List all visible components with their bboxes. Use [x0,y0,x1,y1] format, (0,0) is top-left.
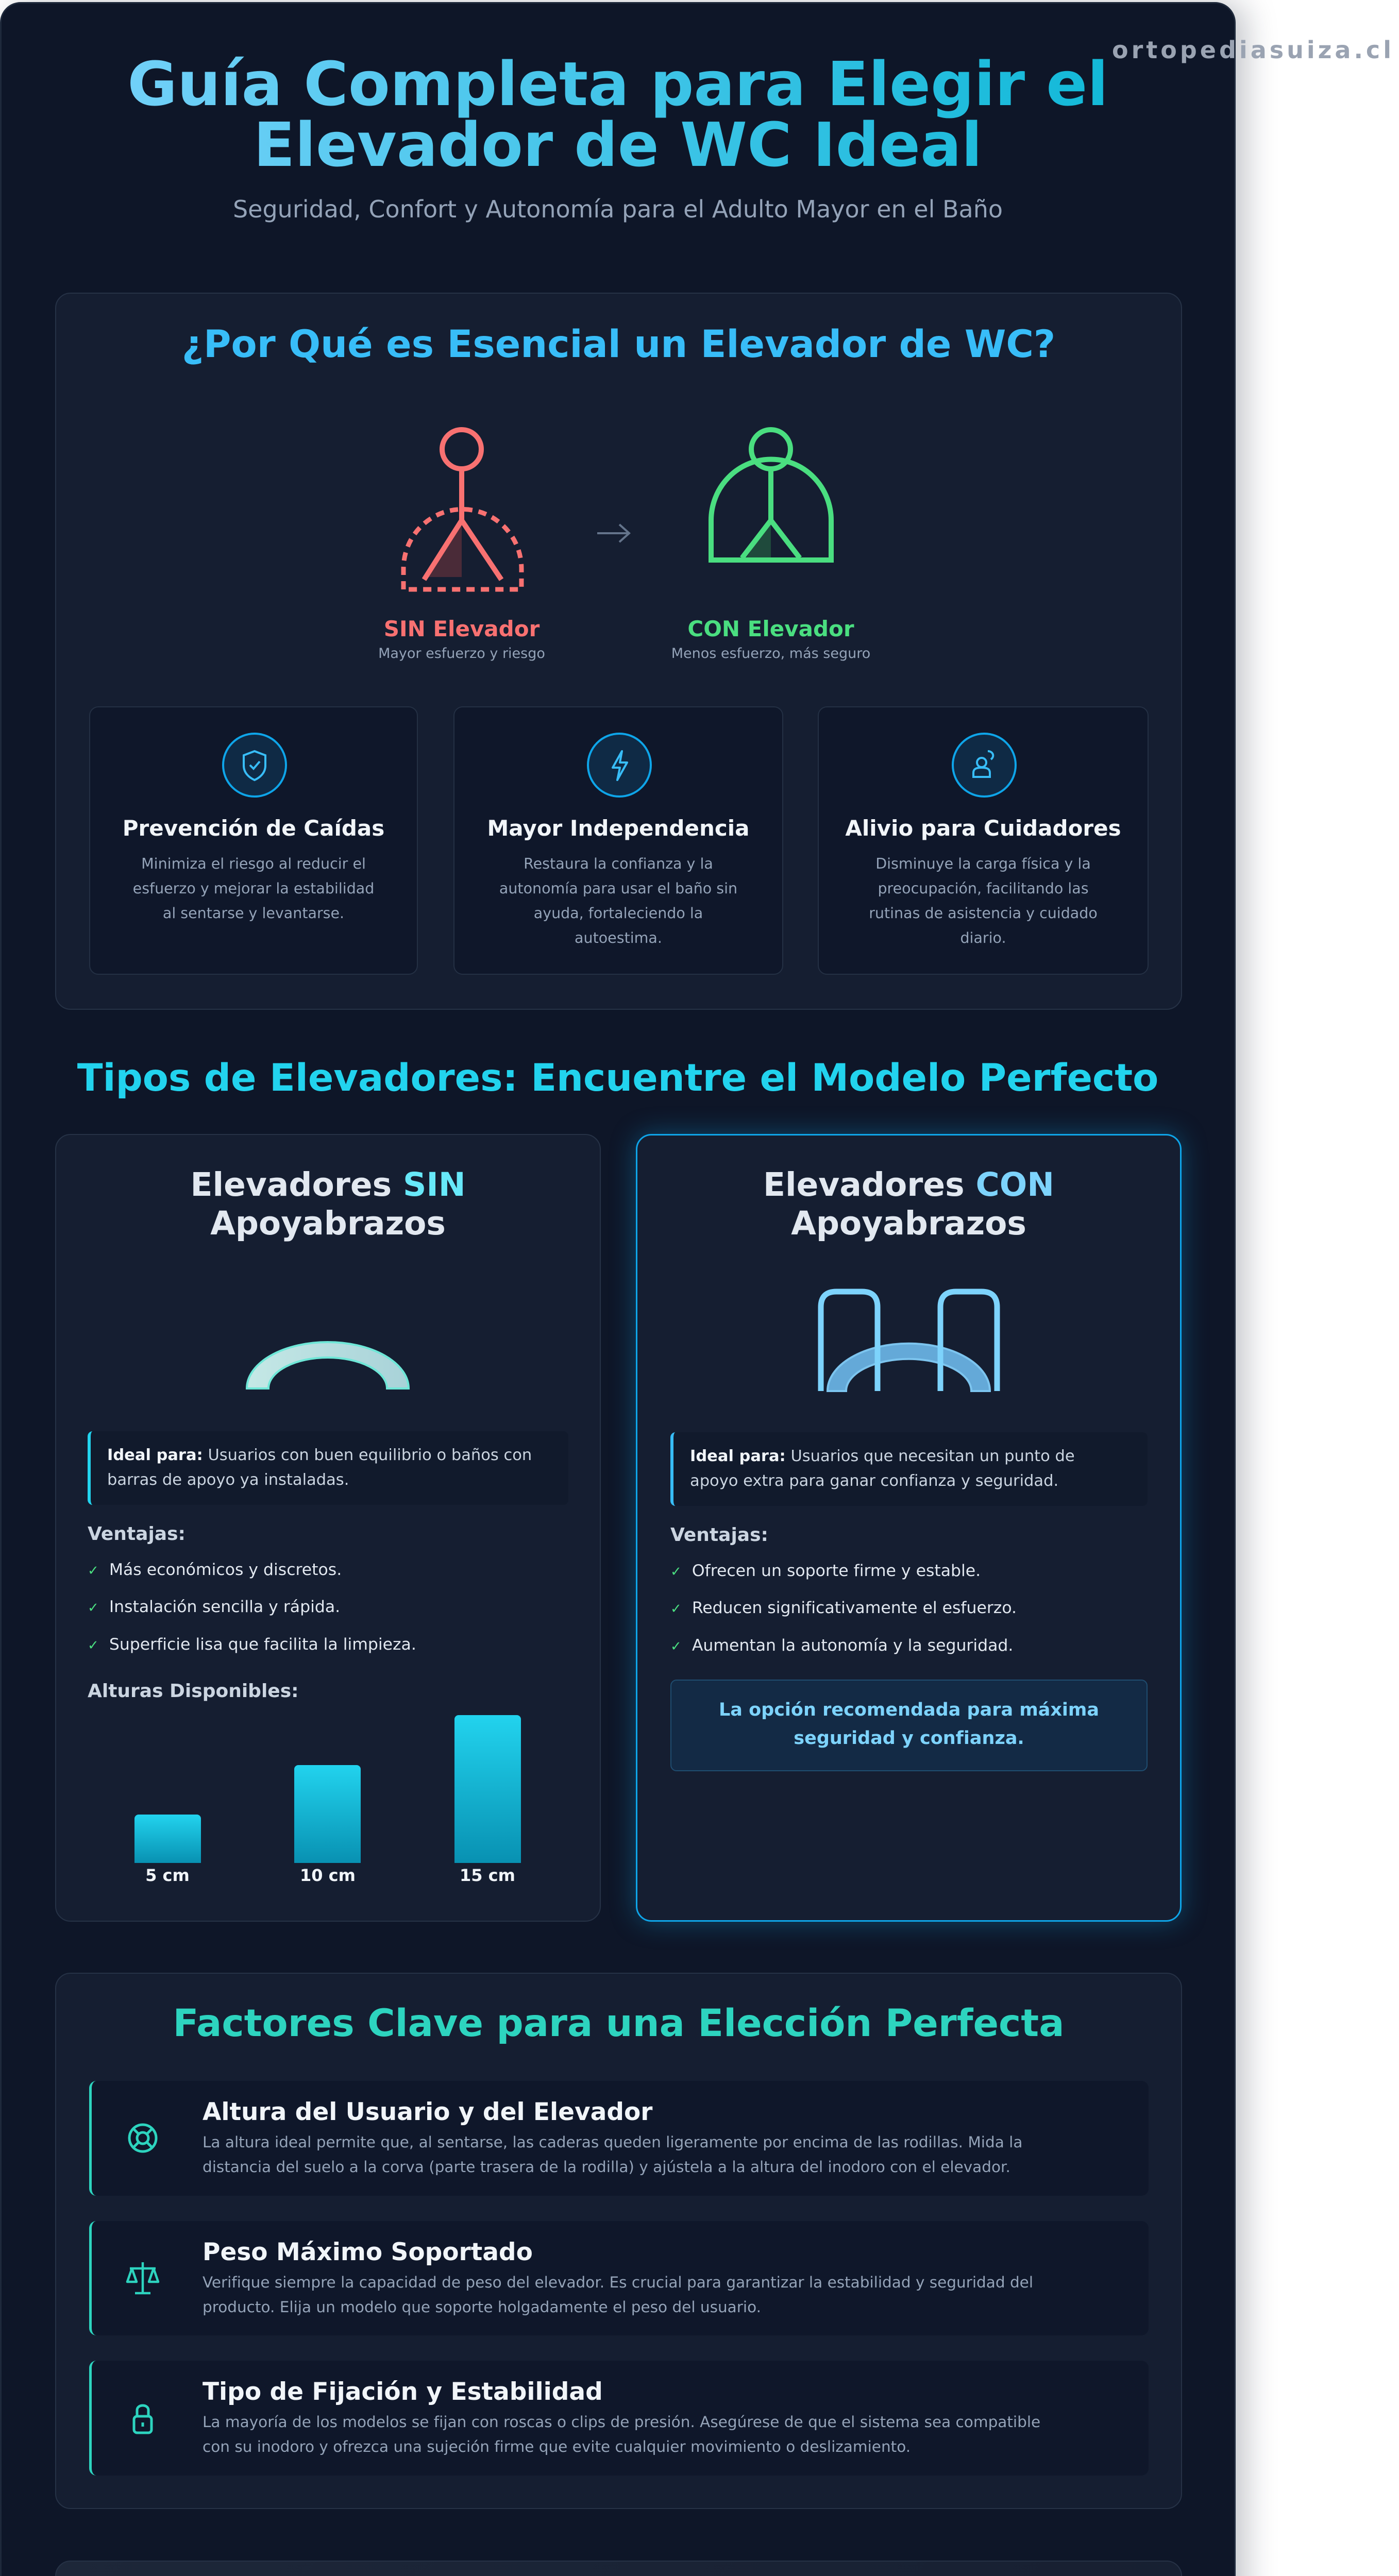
list: ventajas con: ✓ Ofrecen un soporte firme y estable. [670,1562,981,1580]
factor text: Verifique siempre la capacidad de peso del elevador. Es crucial para garantizar la estabilidad y seguridad del [203,2274,1033,2291]
card text: rutinas de asistencia y cuidado [869,905,1098,922]
card text: ayuda, fortaleciendo la [534,905,703,922]
card text: autoestima. [575,929,662,946]
card text [499,855,737,946]
label: SIN Elevador [378,616,545,662]
factor text: La mayoría de los modelos se fijan con roscas o clips de presión. Asegúrese de que el sistema sea compatible [203,2413,1040,2431]
card title: Prevención de Caídas [123,816,384,841]
callout: ideal para sin: Ideal para: Usuarios con buen equilibrio o baños con [107,1446,532,1464]
card text: preocupación, facilitando las [878,880,1089,897]
panel title [190,1166,466,1242]
card title: Alivio para Cuidadores [845,816,1121,841]
list: ventajas sin [88,1523,416,1654]
watermark: ortopediasuiza.cl [1112,36,1394,64]
factor text [203,2133,1022,2176]
callout: ideal para con [670,1432,1148,1506]
list: ventajas con [670,1524,1017,1655]
panel: factores clave [55,1973,1182,2509]
label: SIN Elevador: SIN Elevador [384,616,540,641]
label: CON Elevador [671,616,870,662]
subtitle: Seguridad, Confort y Autonomía para el Adulto Mayor en el Baño [233,195,1003,223]
icon: person without elevator [401,427,524,591]
panel title: Elevadores SIN [190,1166,466,1204]
factor text: distancia del suelo a la corva (parte trasera de la rodilla) y ajústela a la altura del inodoro con el elevador. [203,2158,1010,2176]
panel title: Elevadores CON [763,1166,1054,1204]
label: CON Elevador: CON Elevador [687,616,854,641]
panel: sin apoyabrazos [55,1134,601,1922]
callout: recommendation [670,1680,1148,1771]
list: ventajas con: Ventajas: [670,1524,768,1546]
icon: lock [133,2404,153,2434]
bar chart: alturas disponibles: 15 cm [460,1866,515,1885]
card text [869,855,1098,946]
heading: types: Tipos de Elevadores: Encuentre el Modelo Perfecto [77,1056,1158,1100]
callout: recommendation: seguridad y confianza. [794,1728,1024,1749]
list: ventajas sin: Ventajas: [88,1523,186,1545]
factor text [203,2413,1040,2455]
panel title: Apoyabrazos [791,1205,1026,1242]
bar chart: alturas disponibles: 5 cm [145,1866,190,1885]
icon: seat with arms [818,1289,1000,1392]
title: Guía Completa para Elegir el [127,48,1108,120]
callout: recommendation: La opción recomendada para máxima [719,1700,1099,1720]
card: Alivio para Cuidadores [818,706,1149,975]
list: ventajas con: ✓ Aumentan la autonomía y la seguridad. [670,1636,1013,1655]
arrow [597,523,631,543]
bar chart: alturas disponibles: 10 cm [300,1866,356,1885]
bar chart: alturas disponibles [88,1681,521,1885]
icon: person with elevator [709,427,834,563]
factor title: Peso Máximo Soportado [203,2238,533,2266]
factor card: fijacion [89,2361,1149,2476]
card text: al sentarse y levantarse. [163,905,344,922]
card title: Mayor Independencia [487,816,750,841]
card text: autonomía para usar el baño sin [499,880,737,897]
card text [133,855,374,922]
factor card: peso [89,2221,1149,2335]
factor card: altura [89,2081,1149,2196]
list: ventajas sin: ✓ Más económicos y discretos. [88,1561,342,1579]
heading: factores: Factores Clave para una Elección Perfecta [173,2002,1064,2045]
panel: con apoyabrazos [636,1134,1182,1922]
list: ventajas sin: ✓ Instalación sencilla y rápida. [88,1598,340,1616]
card: Prevención de Caídas [89,706,418,975]
card text: esfuerzo y mejorar la estabilidad [133,880,374,897]
factor text: La altura ideal permite que, al sentarse, las caderas queden ligeramente por encima de las rodillas. Mida la [203,2133,1022,2151]
panel title: Apoyabrazos [210,1205,446,1242]
card text: Minimiza el riesgo al reducir el [141,855,366,872]
callout: ideal para con: apoyo extra para ganar confianza y seguridad. [690,1472,1058,1490]
card: Mayor Independencia [453,706,783,975]
factor title: Tipo de Fijación y Estabilidad [203,2378,603,2406]
callout: ideal para sin [88,1431,568,1505]
list: ventajas con: ✓ Reducen significativamente el esfuerzo. [670,1599,1017,1617]
card text: Disminuye la carga física y la [875,855,1091,872]
icon: lifebuoy [128,2124,158,2153]
factor text [203,2274,1033,2316]
factor text: con su inodoro y ofrezca una sujeción firme que evite cualquier movimiento o deslizamiento. [203,2438,911,2455]
heading: why: ¿Por Qué es Esencial un Elevador de WC? [182,323,1055,366]
icon: shield [222,733,287,798]
icon: bolt [587,733,652,798]
panel: más allá [55,2561,1182,2576]
callout: ideal para con: Ideal para: Usuarios que necesitan un punto de [690,1447,1075,1465]
icon: scale [126,2262,160,2295]
title: Elevador de WC Ideal [254,109,982,180]
bar chart: alturas disponibles: Alturas Disponibles: [88,1681,299,1702]
list: ventajas sin: ✓ Superficie lisa que facilita la limpieza. [88,1635,416,1654]
panel: why essential [55,293,1182,1010]
factor title: Altura del Usuario y del Elevador [203,2098,652,2126]
label: SIN Elevador: Mayor esfuerzo y riesgo [378,646,545,662]
card text: Restaura la confianza y la [524,855,713,872]
callout: ideal para sin: barras de apoyo ya instaladas. [107,1471,349,1489]
card text: diario. [960,929,1006,946]
label: CON Elevador: Menos esfuerzo, más seguro [671,646,870,662]
icon: caregiver [952,733,1017,798]
panel title [763,1166,1054,1242]
title [0,54,1236,175]
icon: seat without arms [246,1341,410,1389]
factor text: producto. Elija un modelo que soporte holgadamente el peso del usuario. [203,2298,761,2316]
